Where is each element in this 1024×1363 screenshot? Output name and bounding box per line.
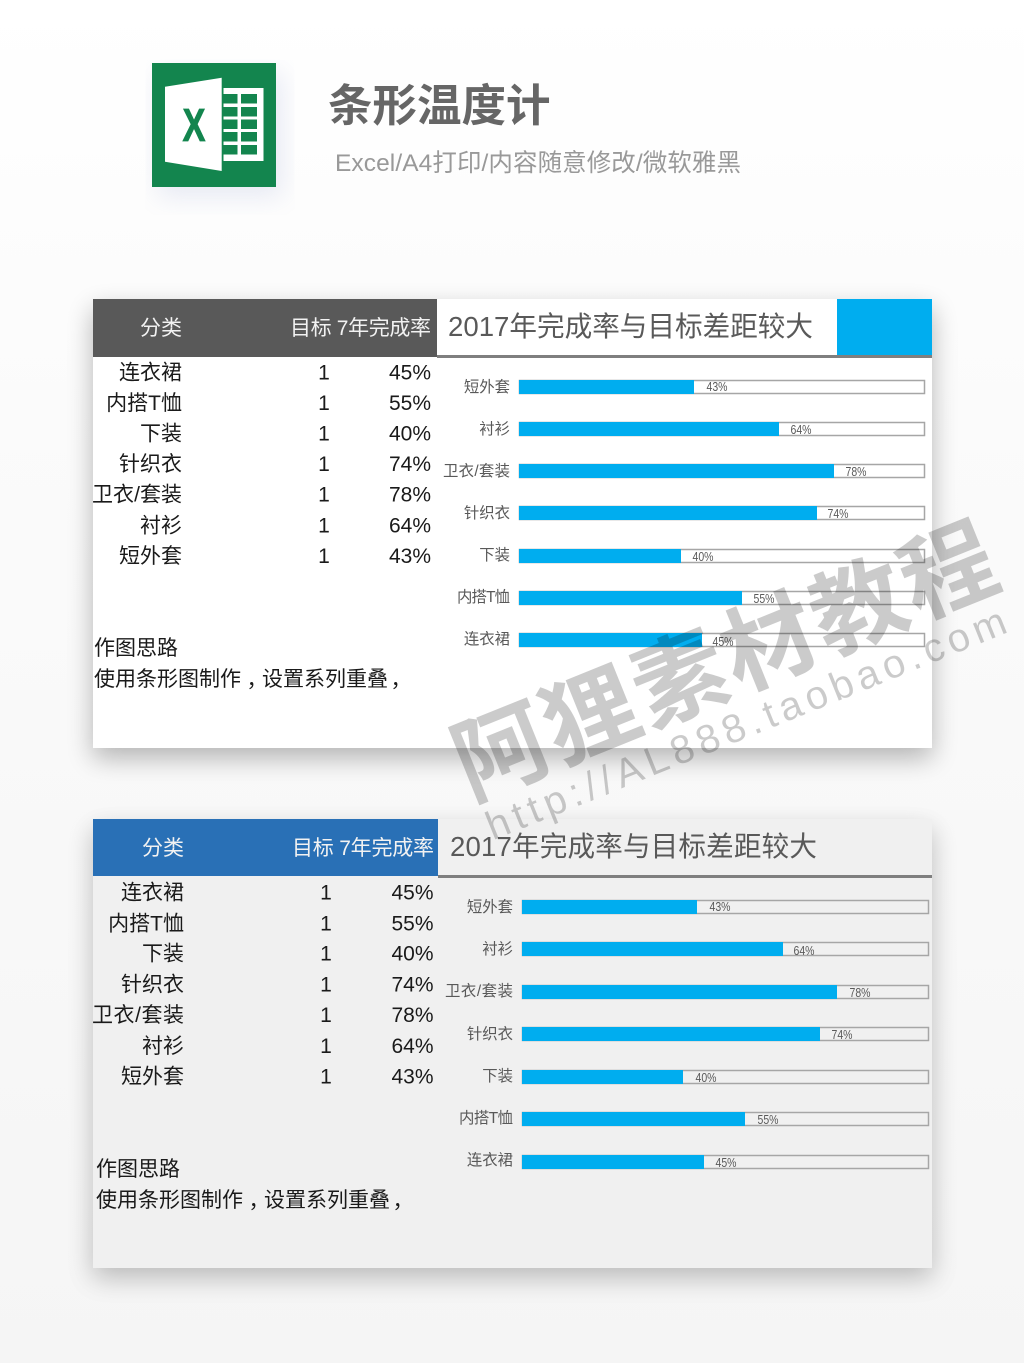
data table: 卫衣/套装 — [92, 1004, 184, 1027]
data table: 64% — [391, 1035, 434, 1058]
bar chart: 45% — [712, 634, 734, 649]
notes text: ， — [243, 1191, 264, 1221]
data table: 下装 — [140, 422, 182, 446]
data table: 1 — [318, 484, 330, 506]
bar chart — [443, 378, 924, 649]
notes text: 作图思路 — [94, 637, 178, 660]
bar chart: 衬衫 — [479, 420, 510, 438]
bar chart — [445, 898, 928, 1170]
data table: 40% — [391, 942, 434, 966]
subtitle: Excel/A4打印/内容随意修改/微软雅黑 — [335, 149, 741, 177]
bar chart: 78% — [850, 985, 871, 1000]
bar chart: 45% — [716, 1155, 737, 1170]
chart title: 2017年完成率与目标差距较大 — [448, 311, 813, 342]
data table: 55% — [389, 392, 431, 415]
bar chart: 针织衣 — [464, 504, 510, 522]
notes text: 使用条形图制作 — [94, 668, 241, 691]
data table: 连衣裙 — [121, 882, 184, 904]
data table: 43% — [391, 1066, 434, 1088]
data table: 内搭T恤 — [108, 912, 184, 936]
bar chart: 40% — [692, 549, 714, 564]
bar chart: 短外套 — [467, 898, 513, 916]
data table: 1 — [318, 545, 330, 568]
chart rule — [437, 355, 932, 358]
panel: white version — [92, 299, 932, 758]
data table: 55% — [391, 912, 434, 936]
bar chart: 连衣裙 — [467, 1151, 513, 1169]
bar chart: 内搭T恤 — [459, 1109, 513, 1127]
data table: 连衣裙 — [119, 362, 182, 384]
notes text: ， — [385, 670, 406, 700]
data table: 1 — [320, 882, 332, 904]
data table: 40% — [389, 422, 431, 446]
notes text: ， — [387, 1191, 408, 1221]
data table: 1 — [320, 942, 332, 966]
bar chart: 78% — [846, 464, 867, 479]
data table: 针织衣 — [121, 974, 184, 996]
data table: 1 — [320, 974, 332, 996]
bar chart: 下装 — [479, 546, 510, 564]
data table: 1 — [320, 1066, 332, 1088]
bar chart: 43% — [706, 379, 728, 394]
table header: 目标 7年完成率 — [292, 837, 434, 860]
bar chart: 内搭T恤 — [457, 588, 510, 606]
notes text: 设置系列重叠 — [262, 668, 388, 691]
notes text: 使用条形图制作 — [96, 1189, 243, 1212]
title: 条形温度计 — [328, 82, 551, 131]
notes text: 设置系列重叠 — [264, 1189, 390, 1212]
bar chart: 43% — [710, 899, 731, 914]
bar chart: 卫衣/套装 — [445, 982, 513, 1000]
bar chart: 64% — [790, 422, 812, 437]
blue accent block — [837, 299, 932, 355]
icon: excel logo: X — [182, 99, 206, 151]
bar chart: 55% — [758, 1112, 779, 1127]
data table: 1 — [318, 392, 330, 415]
bar chart: 74% — [832, 1027, 853, 1042]
bar chart: 55% — [754, 591, 775, 606]
bar chart: 短外套 — [464, 378, 510, 396]
data table: 衬衫 — [142, 1035, 184, 1058]
data table: 78% — [391, 1004, 434, 1027]
notes text — [96, 1158, 408, 1221]
data table: 1 — [318, 514, 330, 538]
notes text: 作图思路 — [96, 1158, 180, 1181]
data table — [92, 362, 431, 568]
data table: 针织衣 — [119, 453, 182, 476]
bar chart: 64% — [794, 943, 815, 958]
data table: 内搭T恤 — [106, 392, 182, 415]
data table — [92, 882, 434, 1088]
data table: 74% — [391, 974, 434, 996]
notes text: ， — [241, 670, 262, 700]
notes text — [94, 637, 406, 700]
data table: 78% — [389, 484, 431, 506]
data table: 45% — [391, 882, 434, 904]
bar chart: 连衣裙 — [464, 630, 510, 648]
bar chart: 40% — [696, 1070, 717, 1085]
chart title: 2017年完成率与目标差距较大 — [450, 831, 817, 862]
table header — [93, 299, 437, 357]
data table: 衬衫 — [140, 514, 182, 538]
data table: 43% — [389, 545, 431, 568]
watermark: 阿狸素材教程 — [438, 505, 1012, 819]
data table: 74% — [389, 453, 431, 476]
data table: 短外套 — [121, 1066, 184, 1088]
bar chart: 下装 — [482, 1067, 513, 1085]
chart rule — [438, 875, 932, 878]
data table: 64% — [389, 514, 431, 538]
bar chart: 针织衣 — [467, 1025, 513, 1043]
data table: 1 — [318, 453, 330, 476]
data table: 1 — [318, 422, 330, 446]
panel: grey version — [92, 819, 932, 1278]
bar chart: 卫衣/套装 — [443, 462, 510, 480]
table header: 分类 — [142, 837, 184, 860]
table header: 分类 — [140, 317, 182, 340]
data table: 1 — [320, 1035, 332, 1058]
icon: excel logo — [152, 63, 282, 196]
data table: 下装 — [142, 942, 184, 966]
data table: 1 — [318, 362, 330, 384]
table header: 目标 7年完成率 — [290, 317, 431, 340]
bar chart: 衬衫 — [482, 940, 513, 958]
watermark: http://AL888.taobao.com — [480, 599, 1013, 849]
data table: 1 — [320, 1004, 332, 1027]
bar chart: 74% — [828, 506, 849, 521]
data table: 卫衣/套装 — [92, 484, 182, 506]
table header — [93, 819, 438, 876]
data table: 1 — [320, 912, 332, 936]
data table: 短外套 — [119, 545, 182, 568]
data table: 45% — [389, 362, 431, 384]
